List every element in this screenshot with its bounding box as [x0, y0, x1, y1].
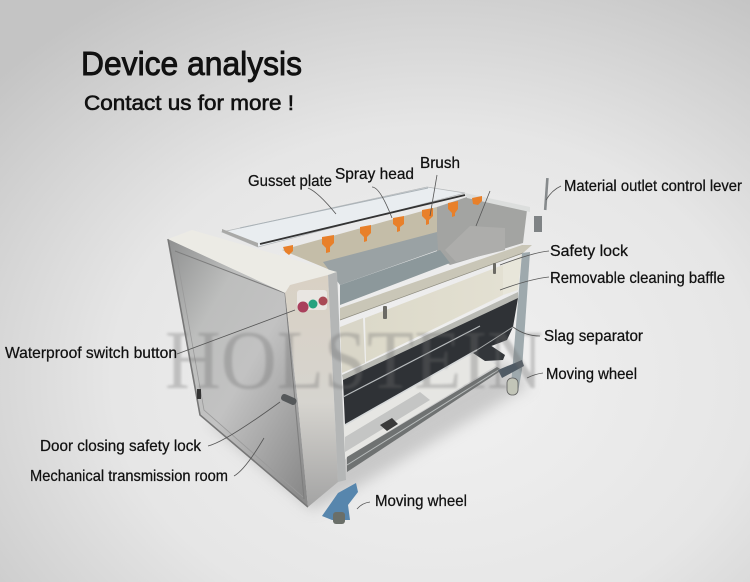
- slag separator dark conveyor: [343, 298, 518, 425]
- right moving wheel: [498, 360, 524, 395]
- lower strip: [342, 292, 518, 380]
- right post: [511, 252, 530, 392]
- interior right wall: [437, 197, 527, 265]
- label: slag separator: Slag separator: [544, 328, 644, 345]
- label: door closing safety lock: Door closing safety lock: [40, 438, 202, 455]
- safety locks: [383, 263, 496, 319]
- door hinge: [197, 389, 201, 399]
- left lower panel: [340, 318, 365, 373]
- wall top rim: [465, 193, 530, 212]
- subtitle: Contact us for more !: [84, 92, 294, 115]
- leader lines: [177, 175, 561, 509]
- label: moving wheel bottom: Moving wheel: [375, 493, 467, 510]
- label: mechanical transmission room: Mechanical transmission room: [30, 468, 228, 485]
- watermark: HOLSTEIN: [165, 314, 543, 407]
- removable cleaning baffle: [365, 265, 503, 362]
- left cabinet: [168, 230, 346, 507]
- material outlet control lever: [534, 178, 549, 232]
- front rail: [340, 245, 532, 320]
- label: moving wheel right: Moving wheel: [546, 366, 637, 383]
- label: spray head: Spray head: [335, 166, 414, 183]
- title: Device analysis: [81, 45, 302, 82]
- tray below conveyor: [343, 353, 497, 460]
- door closing lock: [280, 393, 298, 406]
- roller brushes: [323, 232, 450, 305]
- waterproof switch buttons: [297, 290, 328, 312]
- cabinet top: [168, 230, 337, 293]
- front left moving wheel: [322, 483, 358, 524]
- cabinet side panel: [168, 239, 308, 507]
- interior back wall: [282, 207, 437, 272]
- base rails: [347, 367, 502, 472]
- machine illustration: [168, 178, 549, 524]
- label: removable cleaning baffle: Removable cleaning baffle: [550, 270, 725, 287]
- label: gusset plate: Gusset plate: [248, 173, 332, 190]
- label: brush: Brush: [420, 155, 460, 172]
- cabinet front: [285, 275, 338, 507]
- label: safety lock: Safety lock: [550, 243, 629, 260]
- floor shadow: [205, 360, 530, 510]
- spray heads: [283, 196, 482, 255]
- label: waterproof switch button: Waterproof switch button: [5, 345, 177, 362]
- gusset plate lid: [222, 187, 465, 247]
